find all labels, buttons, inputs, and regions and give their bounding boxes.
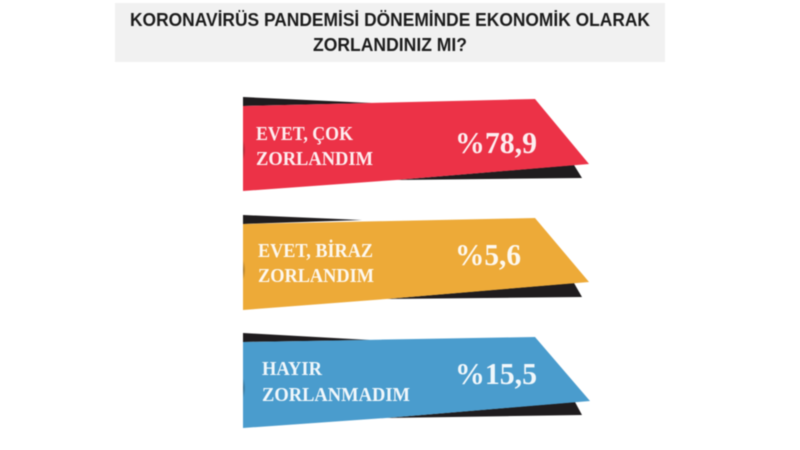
panel: evet çok zorlandım: ZORLANDIM: [256, 148, 373, 170]
panel: hayır zorlanmadım: ZORLANMADIM: [262, 384, 410, 406]
panel: evet çok zorlandım: [243, 97, 589, 191]
panel: hayır zorlanmadım: [243, 333, 590, 428]
panel: hayır zorlanmadım: HAYIR: [262, 358, 323, 380]
panel: evet biraz zorlandım: ZORLANDIM: [258, 265, 374, 287]
panel: evet çok zorlandım: %78,9: [455, 125, 537, 160]
panel: evet biraz zorlandım: EVET, BİRAZ: [258, 238, 373, 262]
panel: evet biraz zorlandım: [243, 215, 589, 310]
panel: evet çok zorlandım: EVET, ÇOK: [256, 123, 353, 145]
panel: hayır zorlanmadım: %15,5: [455, 356, 537, 391]
title: ZORLANDINIZ MI?: [313, 35, 467, 55]
title: KORONAVİRÜS PANDEMİSİ DÖNEMİNDE EKONOMİK OLARAK: [130, 10, 650, 30]
panel: evet biraz zorlandım: %5,6: [455, 237, 521, 272]
title: [115, 3, 665, 62]
